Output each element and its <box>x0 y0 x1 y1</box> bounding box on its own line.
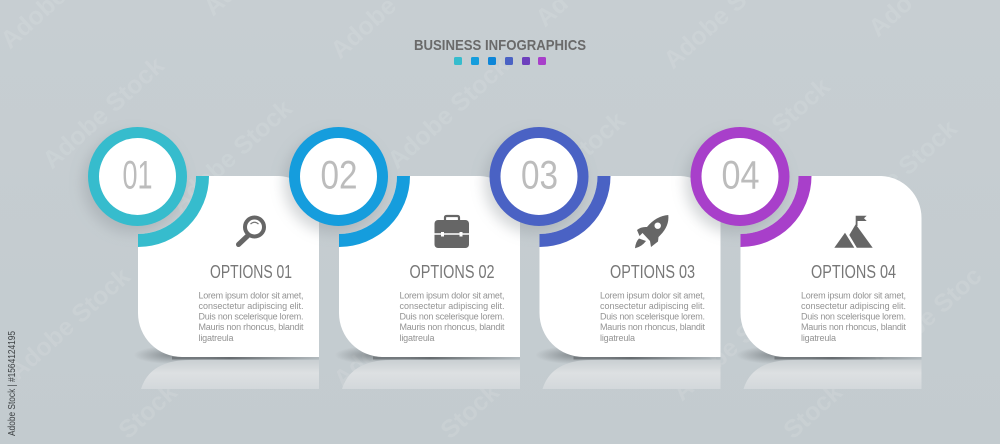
text block: option 3 <box>600 290 705 343</box>
icon: mountain flag <box>834 216 873 248</box>
heading: options 04: OPTIONS 04 <box>811 262 896 282</box>
badge: 04 <box>686 132 812 247</box>
badge: 03: 03 <box>521 154 558 198</box>
watermark: Stock <box>435 378 505 444</box>
text block: option 3: Lorem ipsum dolor sit amet, <box>600 290 705 300</box>
text block: option 1 <box>198 290 304 343</box>
text block: option 4: consectetur adipiscing elit. <box>801 301 906 311</box>
icon: rocket <box>635 215 668 248</box>
watermark: Adobe Stock <box>830 114 963 237</box>
text block: option 1: Lorem ipsum dolor sit amet, <box>198 290 304 300</box>
text block: option 1: Duis non scelerisque lorem. <box>198 312 304 322</box>
text block: option 4: Mauris non rhoncus, blandit <box>801 322 906 332</box>
badge: 02 <box>284 132 410 247</box>
text block: option 3: consectetur adipiscing elit. <box>600 301 705 311</box>
badge: 03 <box>484 132 610 247</box>
stock id label: Adobe Stock | #1564124195 <box>6 331 18 436</box>
text block: option 1: consectetur adipiscing elit. <box>198 301 304 311</box>
watermark: Adobe Stock <box>498 106 631 229</box>
badge: 01 <box>83 132 209 247</box>
text block: option 2: ligatreula <box>400 333 434 343</box>
text block: option 2: consectetur adipiscing elit. <box>400 301 504 311</box>
title colour dots <box>454 57 546 65</box>
heading: options 03: OPTIONS 03 <box>610 262 695 282</box>
watermark: Adobe Stock <box>667 283 800 406</box>
panel: option 2 <box>335 176 520 389</box>
text block: option 1: Mauris non rhoncus, blandit <box>198 322 304 332</box>
watermark: Stock <box>778 378 848 444</box>
badge: 04: 04 <box>722 154 760 198</box>
text block: option 2: Duis non scelerisque lorem. <box>400 312 504 322</box>
watermark: Adobe Stock <box>382 51 515 174</box>
text block: option 4: Duis non scelerisque lorem. <box>801 312 906 322</box>
text block: option 3: Mauris non rhoncus, blandit <box>600 322 705 332</box>
watermark: Adobe Stock <box>37 51 170 174</box>
text block: option 4: Lorem ipsum dolor sit amet, <box>801 290 906 300</box>
panel: option 3 <box>536 176 720 389</box>
heading: options 01: OPTIONS 01 <box>210 262 292 282</box>
icon: briefcase <box>434 216 469 248</box>
badge: 01: 01 <box>122 154 152 198</box>
badge: 02: 02 <box>320 154 358 198</box>
text block: option 2: Mauris non rhoncus, blandit <box>400 322 505 332</box>
watermark: Stock <box>113 378 183 444</box>
watermark: Adobe Stoc <box>865 262 987 375</box>
watermark: Adobe Stock <box>703 72 836 195</box>
icon: magnifier <box>238 218 264 244</box>
watermark: Adobe Stock <box>328 270 461 393</box>
text block: option 2: Lorem ipsum dolor sit amet, <box>400 290 504 300</box>
title: BUSINESS INFOGRAPHICS <box>414 37 586 54</box>
text block: option 4: ligatreula <box>801 333 836 343</box>
watermark: Adobe Stock <box>165 94 298 217</box>
panel: option 1 <box>134 176 319 389</box>
watermark: Adobe Stock <box>3 262 136 385</box>
text block: option 1: ligatreula <box>198 333 234 343</box>
text block: option 4 <box>801 290 906 343</box>
text block: option 3: ligatreula <box>600 333 635 343</box>
text block: option 2 <box>400 290 505 343</box>
heading: options 02: OPTIONS 02 <box>410 262 494 282</box>
text block: option 3: Duis non scelerisque lorem. <box>600 312 705 322</box>
panel: option 4 <box>736 176 922 389</box>
